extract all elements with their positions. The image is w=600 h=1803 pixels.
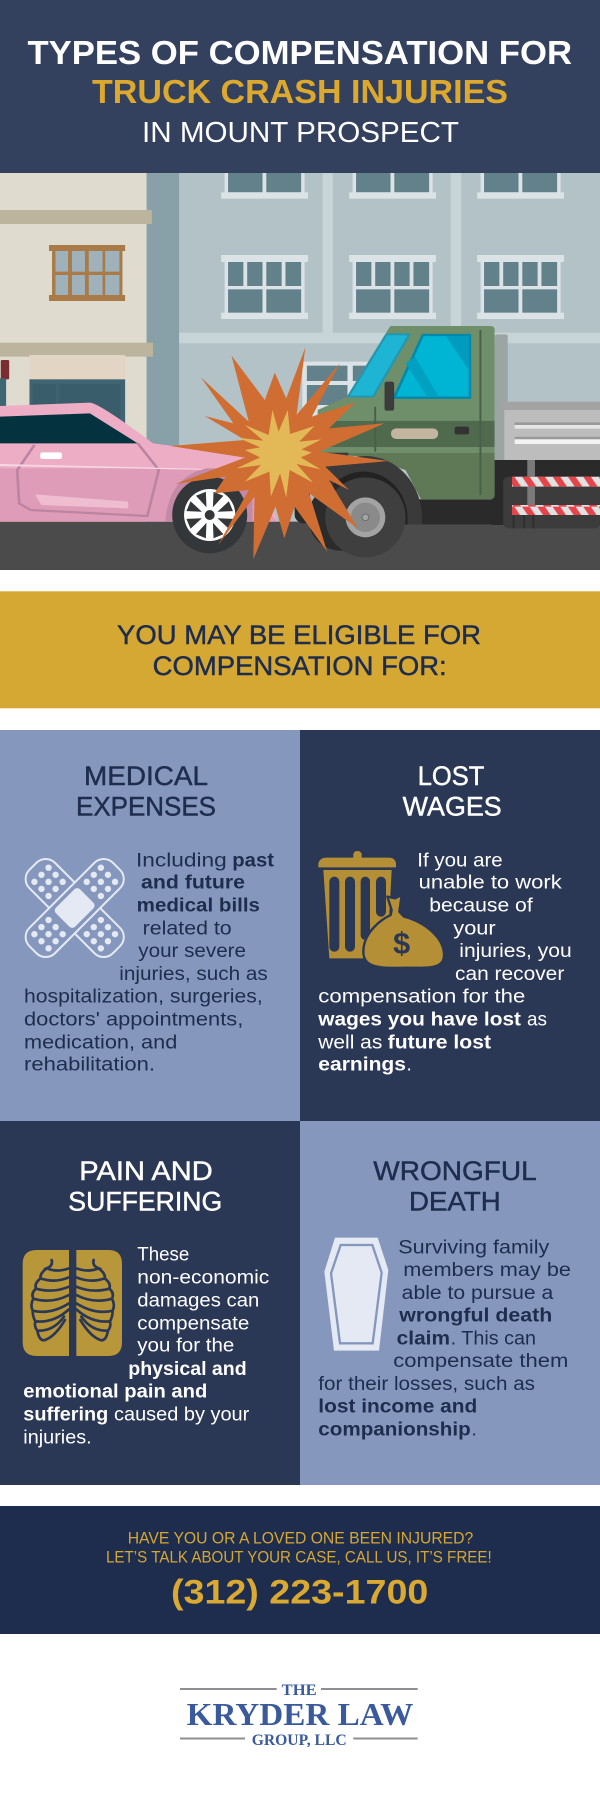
logo: The Kryder Law Group, LLC: KRYDER LAW bbox=[187, 1696, 413, 1732]
heading: wrongful death: DEATH bbox=[409, 1187, 501, 1217]
body text: wrongful death: . This can bbox=[451, 1328, 536, 1349]
gold eligibility banner bbox=[0, 591, 600, 708]
panel: lost wages bbox=[300, 730, 600, 1121]
road bbox=[0, 522, 600, 572]
body text: lost wages: compensation for the bbox=[318, 987, 525, 1008]
heading: medical expenses: EXPENSES bbox=[76, 792, 216, 822]
panel: medical expenses bbox=[0, 730, 300, 1121]
banner line 2: COMPENSATION FOR: bbox=[153, 651, 447, 681]
body text: lost wages: . bbox=[406, 1055, 412, 1076]
grey building bbox=[147, 170, 600, 523]
panel: pain and suffering bbox=[0, 1121, 300, 1485]
header panel bbox=[0, 0, 600, 173]
icon: coffin bbox=[324, 1238, 388, 1351]
body text: medical expenses: Including bbox=[136, 851, 227, 872]
body text: medical expenses: medical bills bbox=[137, 896, 260, 917]
body text: pain and suffering: you for the bbox=[137, 1336, 234, 1357]
body text: pain and suffering: injuries. bbox=[23, 1427, 92, 1448]
body text: medical expenses: rehabilitation. bbox=[24, 1055, 155, 1076]
body text: pain and suffering: These bbox=[137, 1245, 189, 1266]
body text: wrongful death: wrongful death bbox=[398, 1306, 552, 1327]
title line 1: TYPES OF COMPENSATION FOR bbox=[28, 35, 572, 72]
heading: pain and suffering: PAIN AND bbox=[79, 1156, 213, 1186]
banner line 1: YOU MAY BE ELIGIBLE FOR bbox=[117, 620, 481, 650]
logo: The Kryder Law Group, LLC: GROUP, LLC bbox=[252, 1732, 347, 1749]
body text: medical expenses: medication, and bbox=[24, 1032, 177, 1053]
body text: lost wages: future lost bbox=[388, 1032, 492, 1053]
body text: lost wages: can recover bbox=[455, 964, 565, 985]
body text: lost wages: injuries, you bbox=[459, 941, 572, 962]
body text: lost wages: wages you have lost bbox=[317, 1009, 522, 1030]
body text: lost wages: because of bbox=[429, 896, 533, 917]
heading: lost wages: WAGES bbox=[403, 792, 502, 822]
call to action line 2: LET’S TALK ABOUT YOUR CASE, CALL US, IT’S FREE! bbox=[106, 1548, 492, 1566]
heading: wrongful death bbox=[373, 1156, 537, 1217]
call to action footer band bbox=[0, 1506, 600, 1634]
explosion bbox=[170, 347, 388, 559]
body text: lost wages: well as bbox=[317, 1032, 382, 1053]
title line 3: IN MOUNT PROSPECT bbox=[142, 117, 459, 149]
body text: pain and suffering bbox=[23, 1245, 269, 1448]
heading: medical expenses bbox=[76, 761, 216, 822]
truck bbox=[295, 323, 600, 557]
heading: medical expenses: MEDICAL bbox=[84, 761, 208, 791]
icon: crossed bandages bbox=[20, 854, 129, 962]
body text: lost wages: If you are bbox=[417, 851, 503, 872]
body text: pain and suffering: compensate bbox=[137, 1313, 249, 1334]
call to action line 1: HAVE YOU OR A LOVED ONE BEEN INJURED? bbox=[128, 1529, 473, 1547]
body text: medical expenses: doctors' appointments, bbox=[24, 1009, 243, 1030]
icon: trash can and money bag bbox=[318, 851, 444, 968]
heading: pain and suffering bbox=[68, 1156, 222, 1217]
body text: wrongful death: . bbox=[472, 1419, 477, 1440]
heading: wrongful death: WRONGFUL bbox=[373, 1156, 537, 1186]
body text: lost wages: as bbox=[527, 1009, 547, 1030]
icon: trash can and money bag: $ bbox=[393, 926, 410, 960]
body text: pain and suffering: suffering bbox=[23, 1405, 108, 1426]
body text: wrongful death bbox=[318, 1237, 571, 1440]
heading: lost wages: LOST bbox=[418, 761, 484, 791]
body text: medical expenses: related to bbox=[143, 918, 232, 939]
body text: wrongful death: Surviving family bbox=[398, 1237, 550, 1258]
body text: pain and suffering: damages can bbox=[137, 1290, 259, 1311]
body text: lost wages bbox=[317, 851, 572, 1076]
pink car bbox=[0, 403, 277, 553]
body text: medical expenses: your severe bbox=[138, 941, 246, 962]
body text: wrongful death: claim bbox=[397, 1328, 450, 1349]
logo: The Kryder Law Group, LLC: THE bbox=[282, 1682, 317, 1699]
body text: wrongful death: able to pursue a bbox=[402, 1283, 554, 1304]
hero illustration: car and truck collision bbox=[0, 170, 600, 572]
logo: The Kryder Law Group, LLC bbox=[180, 1682, 418, 1749]
body text: wrongful death: companionship bbox=[318, 1419, 471, 1440]
title line 2: TRUCK CRASH INJURIES bbox=[92, 74, 508, 111]
body text: lost wages: earnings bbox=[318, 1055, 406, 1076]
body text: lost wages: unable to work bbox=[419, 873, 562, 894]
heading: lost wages bbox=[403, 761, 502, 822]
body text: medical expenses: past bbox=[232, 851, 275, 872]
heading: pain and suffering: SUFFERING bbox=[68, 1187, 222, 1217]
phone number: (312) 223-1700 bbox=[171, 1573, 428, 1611]
body text: wrongful death: members may be bbox=[403, 1260, 571, 1281]
body text: pain and suffering: caused by your bbox=[114, 1405, 250, 1426]
body text: medical expenses: and future bbox=[141, 873, 245, 894]
body text: wrongful death: lost income and bbox=[318, 1397, 477, 1418]
body text: wrongful death: compensate them bbox=[393, 1351, 568, 1372]
body text: medical expenses: injuries, such as bbox=[119, 964, 268, 985]
body text: pain and suffering: physical and bbox=[128, 1359, 247, 1380]
icon: rib cage bbox=[23, 1250, 122, 1356]
panel: wrongful death bbox=[300, 1121, 600, 1485]
body text: medical expenses bbox=[24, 851, 275, 1076]
body text: pain and suffering: non-economic bbox=[137, 1267, 269, 1288]
body text: pain and suffering: emotional pain and bbox=[23, 1382, 207, 1403]
body text: medical expenses: hospitalization, surgeries, bbox=[24, 987, 263, 1008]
body text: wrongful death: for their losses, such as bbox=[318, 1374, 535, 1395]
body text: lost wages: your bbox=[453, 918, 496, 939]
beige building bbox=[0, 170, 153, 523]
